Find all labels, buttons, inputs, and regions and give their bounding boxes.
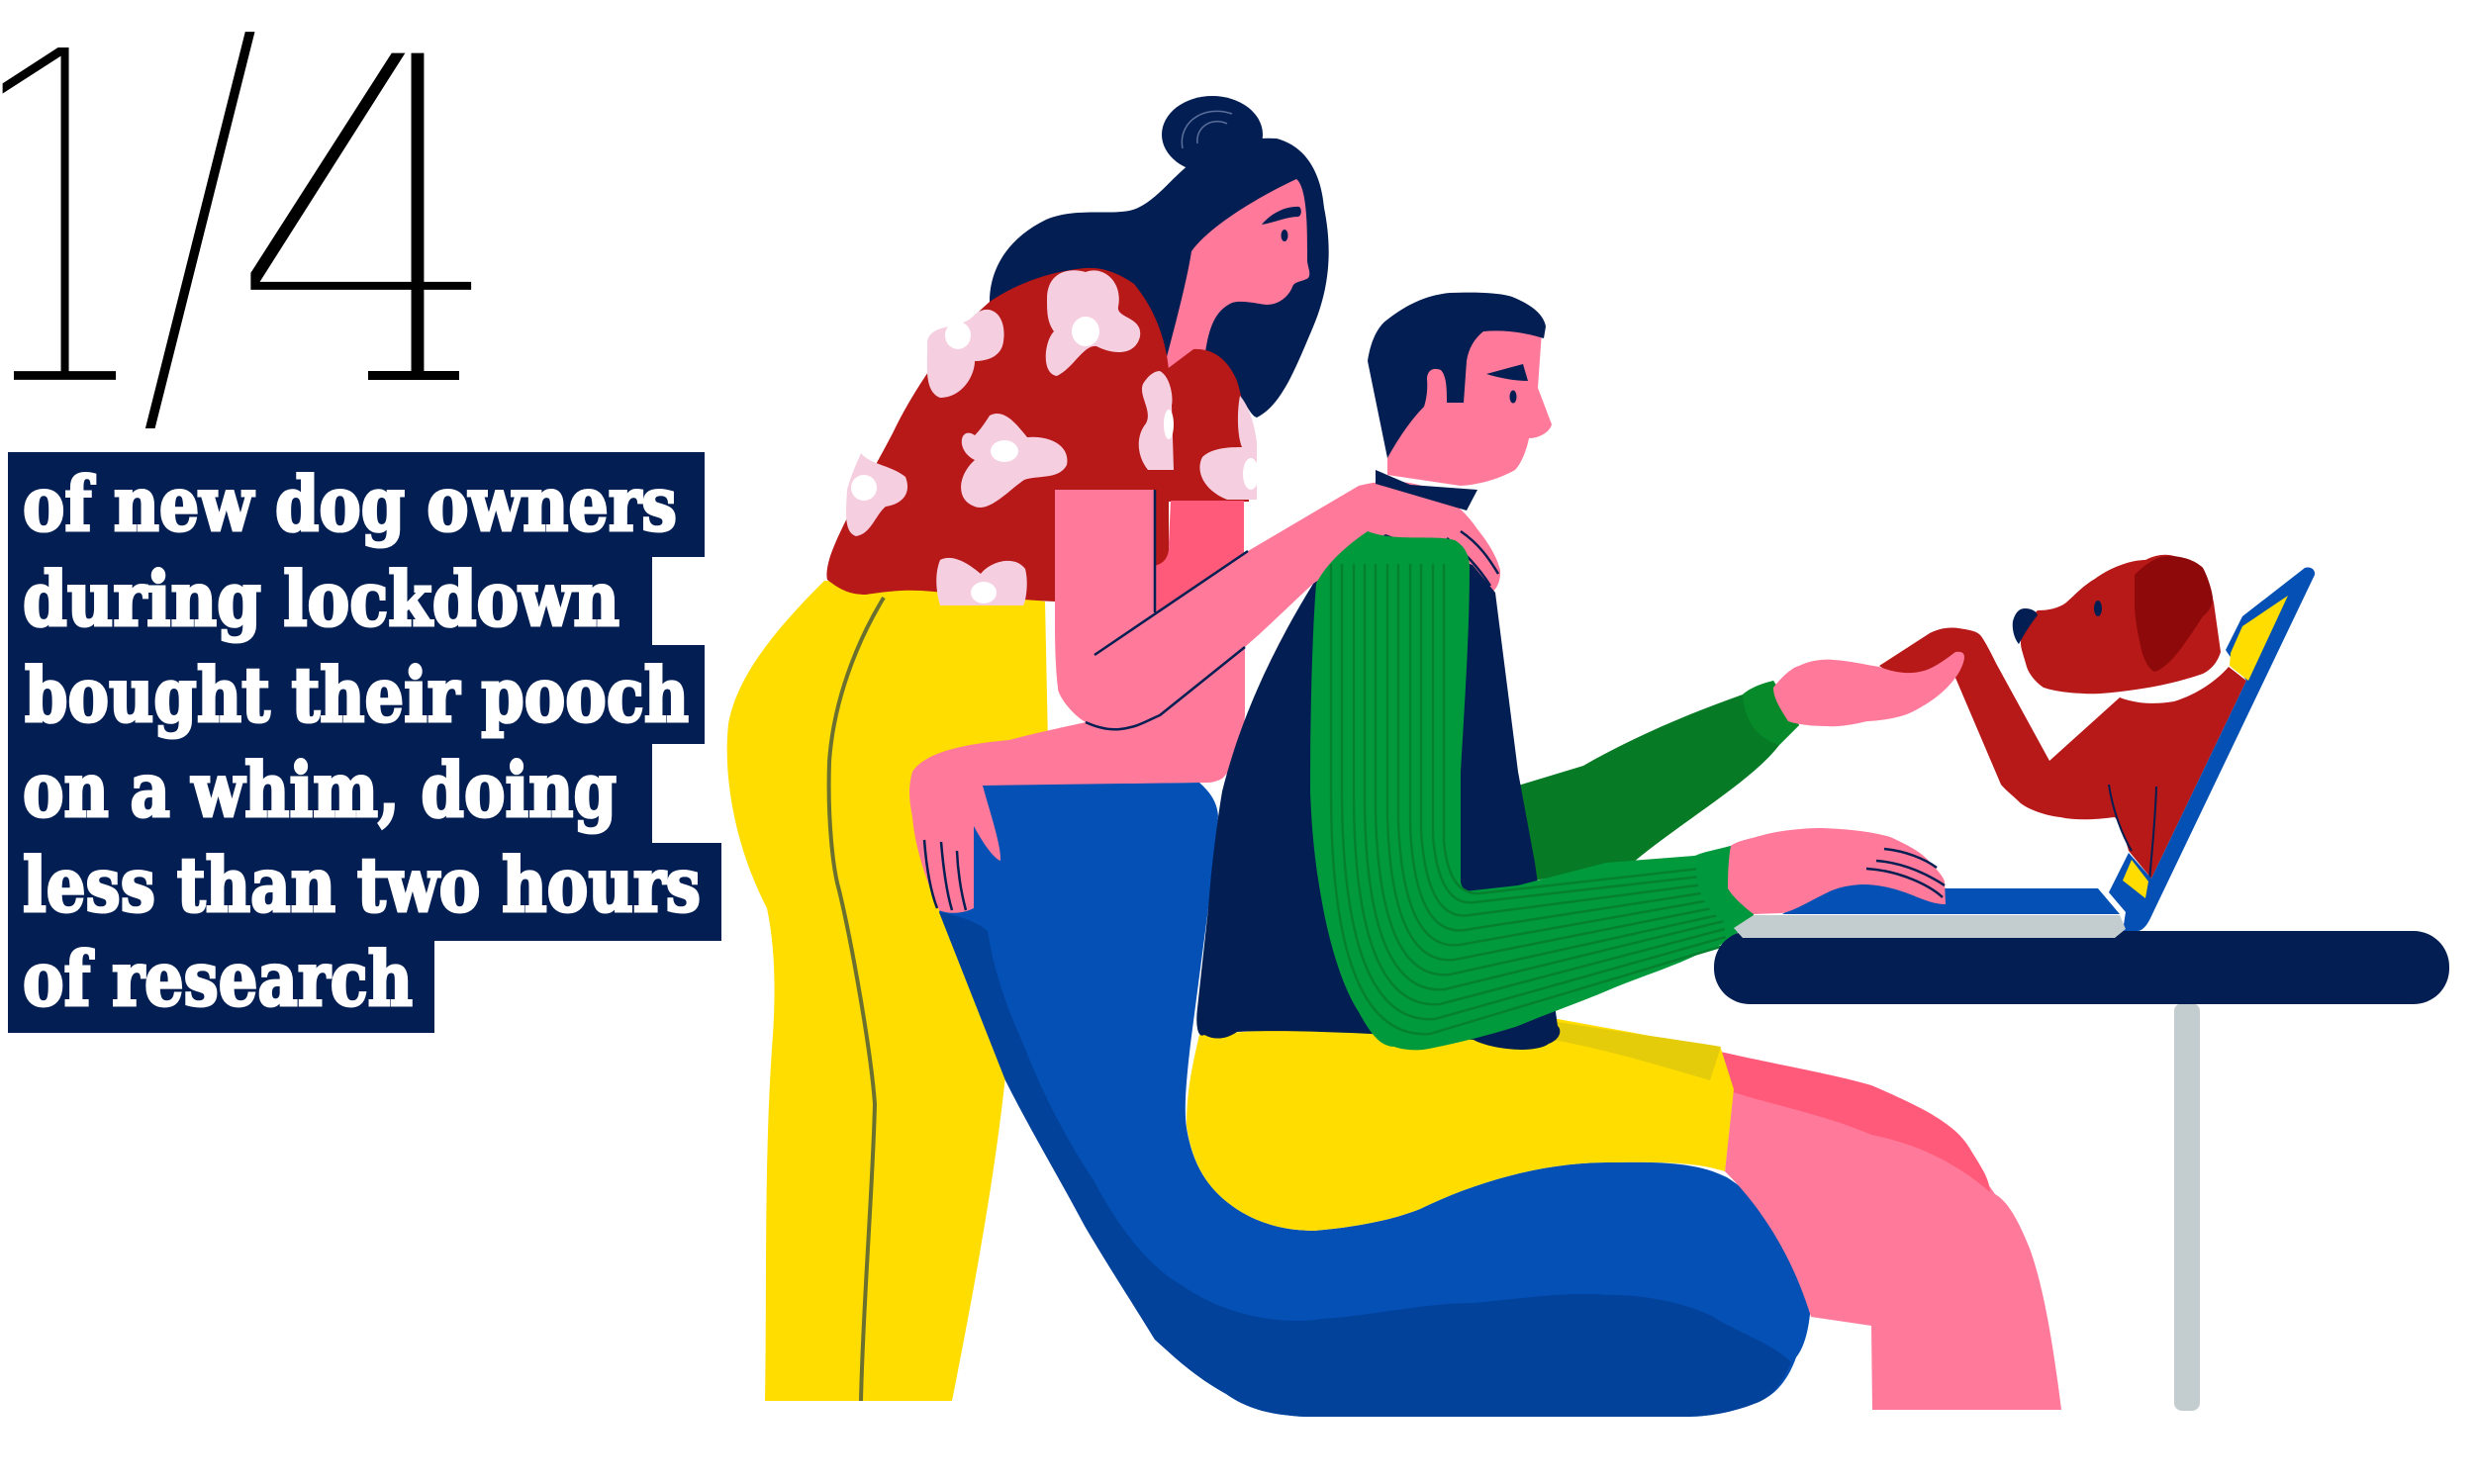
- text block: explanation on navy highlight: during lockdown: [23, 555, 619, 643]
- woman trousers: [727, 581, 1049, 1401]
- man upper hand: [1773, 652, 1964, 726]
- finger lines: [1866, 849, 1945, 897]
- woman torso shadow: [1154, 501, 1244, 615]
- man face: [1387, 322, 1552, 486]
- woman arm outlines: [924, 490, 1498, 910]
- man head: [1368, 293, 1552, 510]
- illustration: couple and dog on laptop: [727, 96, 2449, 1417]
- man vest: [1196, 534, 1560, 1050]
- dog head: [2021, 555, 2221, 694]
- table top: [1714, 931, 2449, 1004]
- woman face and neck: [1164, 179, 1309, 368]
- text block: explanation on navy highlight: [8, 452, 721, 1033]
- woman arm, lap and hand: [909, 482, 1500, 913]
- dog paw arm and body: [1879, 628, 2246, 879]
- text block: explanation on navy highlight: of research: [23, 935, 413, 1023]
- chair: [939, 783, 1811, 1417]
- table leg: [2174, 1003, 2200, 1411]
- dog ear: [2135, 556, 2213, 672]
- man far arm: [1518, 681, 1799, 881]
- woman shirt: [826, 268, 1259, 605]
- dog: [1879, 555, 2246, 881]
- text block: explanation on navy highlight: less than two hours: [23, 841, 701, 929]
- woman brow and eye: [1262, 207, 1301, 241]
- man shorts: [1187, 1019, 1734, 1231]
- flower centres: [851, 317, 1259, 603]
- bun swirl: [1182, 111, 1232, 148]
- laptop screen lower yellow: [2123, 860, 2148, 898]
- sweater ribbing: [1331, 564, 1727, 1034]
- laptop screen yellow: [2230, 596, 2288, 681]
- man legs: [1712, 1051, 2061, 1410]
- shirt flowers: [846, 270, 1257, 605]
- man near arm sweater: [1310, 531, 1755, 1050]
- text block: explanation on navy highlight: on a whim, doing: [23, 746, 617, 834]
- laptop: [1734, 567, 2315, 938]
- laptop keyboard: [1782, 879, 2120, 914]
- woman hair and bun: [990, 96, 1329, 417]
- title: 1/4 statistic: [0, 0, 513, 508]
- dog chest lines: [2109, 785, 2156, 881]
- man lower hand on keyboard: [1728, 828, 1946, 914]
- man neck collar: [1376, 470, 1477, 510]
- text block: explanation on navy highlight: bought their pooch: [25, 651, 689, 739]
- sweater cuff: [1696, 844, 1755, 923]
- man brow and eye: [1486, 364, 1528, 404]
- man hair: [1368, 293, 1546, 458]
- laptop base: [1734, 915, 2126, 938]
- text block: explanation on navy highlight: of new dog owners: [23, 460, 677, 548]
- table: [1714, 931, 2449, 1411]
- dog nose and eye: [2013, 601, 2102, 644]
- laptop screen frame: [2109, 567, 2315, 931]
